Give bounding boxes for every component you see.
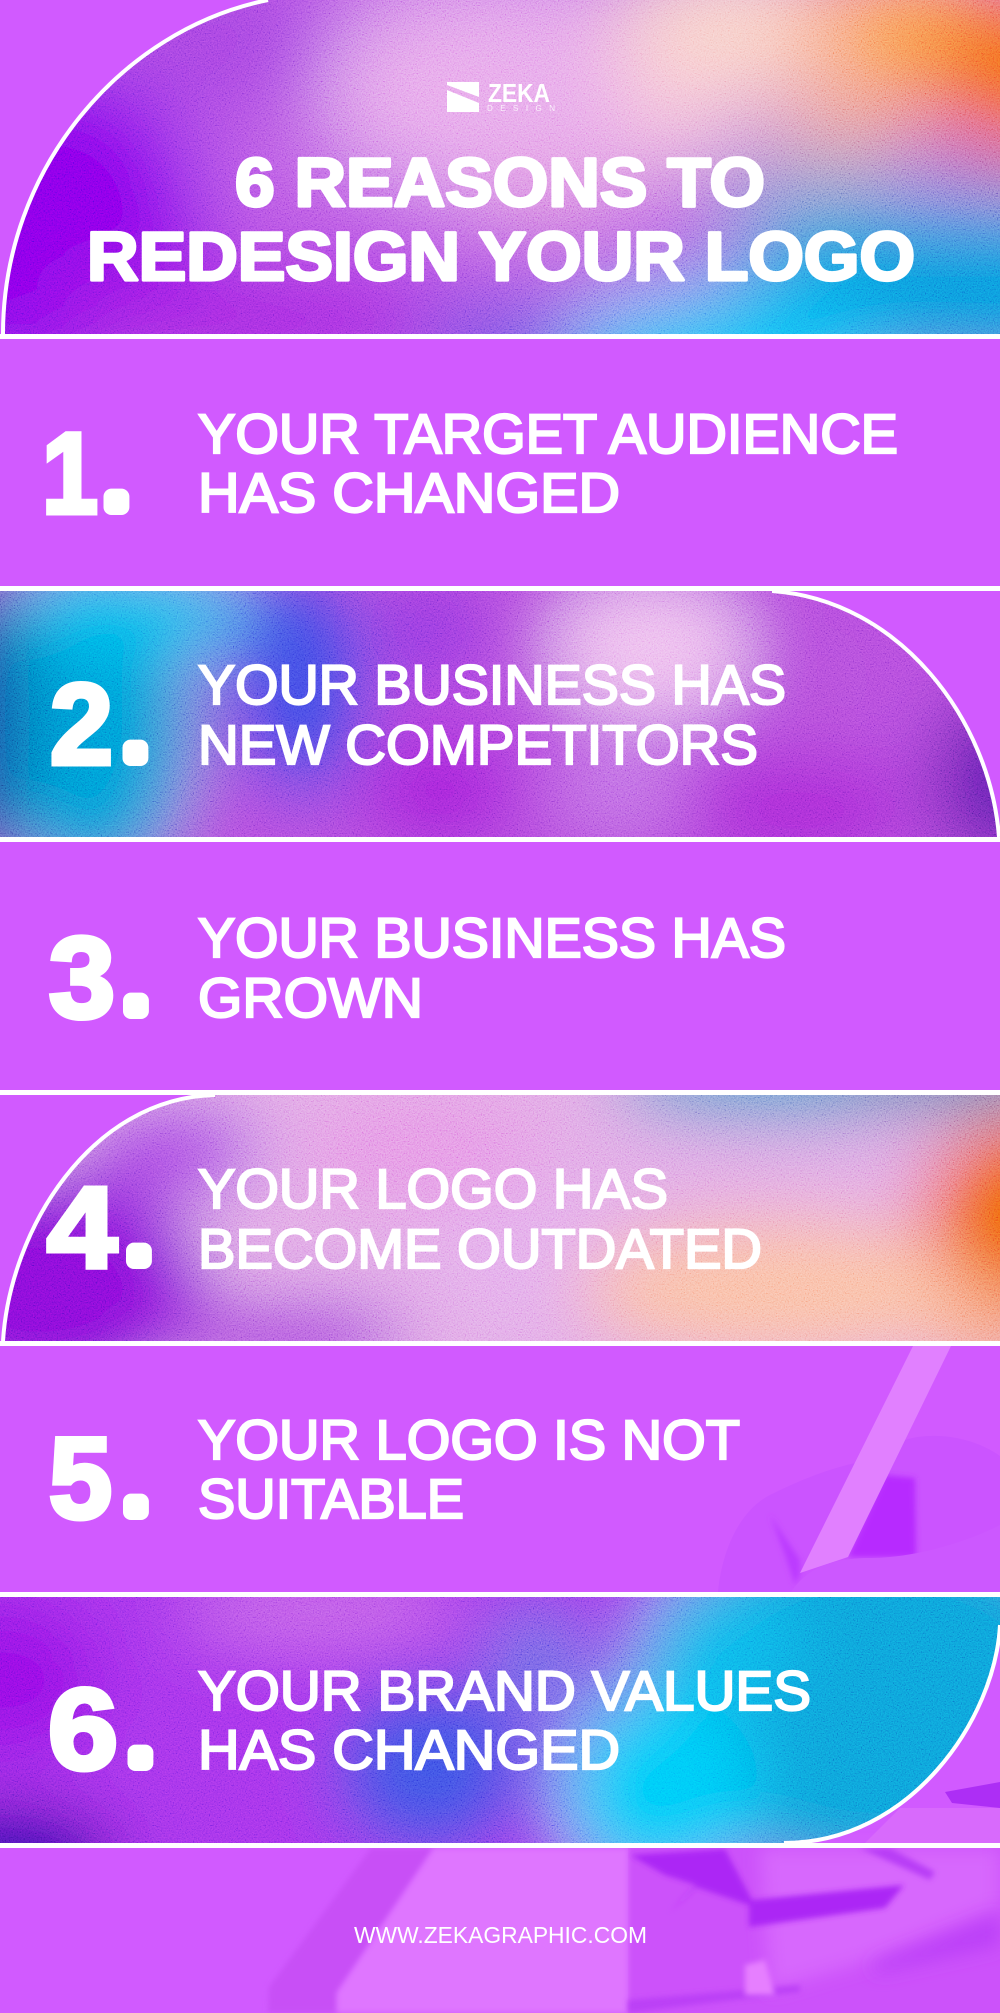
logo tagline: DESIGN xyxy=(487,104,555,113)
number 6 xyxy=(48,1666,150,1794)
number 4 xyxy=(47,1164,149,1292)
reason 1 text: YOUR TARGET AUDIENCE xyxy=(198,402,898,465)
reason 4 xyxy=(47,1157,762,1292)
hand holding a stylus xyxy=(718,1346,1000,1592)
panel: reason 6 gradient xyxy=(0,1597,1000,1843)
logo: Zeka Design xyxy=(447,78,555,113)
number 4: 4 xyxy=(47,1164,117,1292)
number 3 xyxy=(49,914,146,1042)
number 2: . xyxy=(126,695,145,773)
reason 6 xyxy=(48,1659,811,1794)
white band dividers xyxy=(0,334,1000,1848)
reason 2 xyxy=(50,653,786,789)
reason 5 text xyxy=(198,1408,740,1530)
reason 2 text: YOUR BUSINESS HAS xyxy=(198,653,786,716)
title: 6 REASONS TO xyxy=(235,144,765,221)
title: REDESIGN YOUR LOGO xyxy=(87,218,915,295)
reason 5 xyxy=(49,1408,740,1543)
hand silhouette xyxy=(718,1436,1000,1592)
reason 5 text: YOUR LOGO IS NOT xyxy=(198,1408,740,1471)
reason 4 text xyxy=(198,1157,762,1280)
panel: reason 4 gradient xyxy=(1,1095,1000,1341)
number 6: 6 xyxy=(48,1666,118,1794)
reason 3 text: GROWN xyxy=(198,966,423,1029)
palm shadow xyxy=(848,1475,916,1557)
number 3: . xyxy=(126,948,146,1026)
reason 2 text: NEW COMPETITORS xyxy=(198,713,758,776)
logo mark xyxy=(447,82,479,112)
arc outline xyxy=(3,0,268,334)
title xyxy=(87,144,915,295)
finger crease xyxy=(770,1515,800,1585)
reason 1 text: HAS CHANGED xyxy=(198,461,620,524)
logo wordmark: ZEKA xyxy=(488,78,550,108)
reason 1 text xyxy=(198,402,898,524)
arc outline xyxy=(784,1625,1000,1843)
reason 3 text xyxy=(198,906,786,1029)
number 5: 5 xyxy=(49,1415,112,1543)
reason 4 text: YOUR LOGO HAS xyxy=(198,1157,668,1220)
reason 4 text: BECOME OUTDATED xyxy=(198,1217,762,1280)
footer background photo: tablet and shards xyxy=(268,1782,1000,2013)
reason 1 xyxy=(42,402,898,538)
reason 5 text: SUITABLE xyxy=(198,1467,464,1530)
footer url: WWW.ZEKAGRAPHIC.COM xyxy=(354,1922,647,1948)
arc outline xyxy=(3,1095,215,1341)
panel: header gradient xyxy=(1,0,1000,334)
reason 2 text xyxy=(198,653,786,776)
reason 3 text: YOUR BUSINESS HAS xyxy=(198,906,786,969)
reason 3 xyxy=(49,906,786,1042)
reason 6 text xyxy=(198,1659,811,1781)
number 5 xyxy=(49,1415,146,1543)
number 4: . xyxy=(129,1198,149,1276)
stylus xyxy=(800,1346,951,1573)
number 3: 3 xyxy=(49,914,115,1042)
number 1: . xyxy=(107,444,126,522)
reason 6 text: HAS CHANGED xyxy=(198,1718,620,1781)
number 2 xyxy=(50,661,145,789)
number 1: 1 xyxy=(42,410,98,538)
reason 6 text: YOUR BRAND VALUES xyxy=(198,1659,811,1722)
thumb xyxy=(791,1525,1000,1592)
number 5: . xyxy=(126,1449,146,1527)
number 6: . xyxy=(131,1700,150,1778)
arc outline xyxy=(772,591,999,837)
panel: reason 2 gradient xyxy=(0,591,1000,837)
number 2: 2 xyxy=(50,661,113,789)
